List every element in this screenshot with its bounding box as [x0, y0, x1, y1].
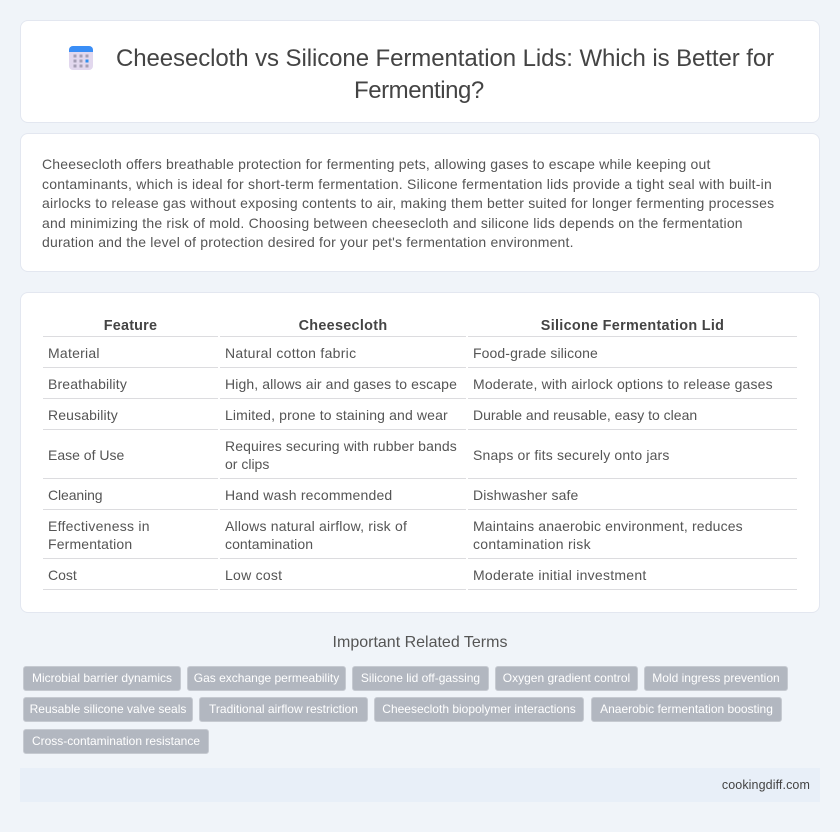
- comparison table: Dishwasher safe: [473, 487, 578, 503]
- comparison table: Snaps or fits securely onto jars: [473, 447, 670, 463]
- icon: calendar: [69, 46, 93, 70]
- related terms tags: Silicone lid off-gassing: [361, 671, 480, 685]
- related terms tags: Cheesecloth biopolymer interactions: [382, 702, 576, 716]
- related terms tags: Oxygen gradient control: [503, 671, 630, 685]
- related terms tags: Reusable silicone valve seals: [30, 702, 186, 716]
- footer bar: [20, 768, 820, 802]
- related terms tags: Cross-contamination resistance: [32, 734, 200, 748]
- title: Cheesecloth vs Silicone Fermentation Lids: Which is Better for: [116, 45, 774, 72]
- footer source: cookingdiff.com: [722, 778, 810, 792]
- panel: introduction: [20, 133, 820, 272]
- text block: introduction: contaminants, which is ideal for short-term fermentation. Silicone fermentation lids provide a tight seal with built-in: [42, 176, 772, 192]
- related terms tags: Traditional airflow restriction: [209, 702, 358, 716]
- comparison table: Natural cotton fabric: [225, 345, 356, 361]
- comparison table: Fermentation: [48, 536, 132, 552]
- comparison table: Food-grade silicone: [473, 345, 598, 361]
- comparison table: Allows natural airflow, risk of: [225, 518, 407, 534]
- related terms tags: [23, 666, 788, 754]
- text block: introduction: [42, 156, 774, 250]
- comparison table: Limited, prone to staining and wear: [225, 407, 448, 423]
- comparison table: Low cost: [225, 567, 282, 583]
- comparison table: Silicone Fermentation Lid: [541, 318, 724, 334]
- related terms tags: Mold ingress prevention: [652, 671, 780, 685]
- comparison table: [43, 318, 797, 590]
- comparison table: Cheesecloth: [299, 318, 387, 334]
- comparison table: High, allows air and gases to escape: [225, 376, 457, 392]
- comparison table: or clips: [225, 456, 269, 472]
- related terms tags: Microbial barrier dynamics: [32, 671, 172, 685]
- text block: introduction: duration and the level of protection desired for your pet's fermentation environment.: [42, 234, 574, 250]
- comparison table: Material: [48, 345, 100, 361]
- title: [116, 45, 774, 104]
- comparison table: contamination risk: [473, 536, 591, 552]
- comparison table: Effectiveness in: [48, 518, 150, 534]
- comparison table: Durable and reusable, easy to clean: [473, 407, 697, 423]
- comparison table: Breathability: [48, 376, 127, 392]
- comparison table: Cleaning: [48, 487, 102, 503]
- heading: related terms: Important Related Terms: [333, 634, 507, 651]
- comparison table: Feature: [104, 318, 157, 334]
- title: Fermenting?: [354, 77, 484, 104]
- panel: comparison table: [20, 292, 820, 613]
- comparison table: Reusability: [48, 407, 118, 423]
- text block: introduction: airlocks to release gas without exposing contents to air, making them better suited for longer fermenting processes: [42, 195, 774, 211]
- comparison table: Maintains anaerobic environment, reduces: [473, 518, 743, 534]
- comparison table: Hand wash recommended: [225, 487, 392, 503]
- comparison table: Cost: [48, 567, 77, 583]
- comparison table: contamination: [225, 536, 313, 552]
- comparison table: Moderate initial investment: [473, 567, 647, 583]
- related terms tags: Gas exchange permeability: [194, 671, 339, 685]
- comparison table: Moderate, with airlock options to release gases: [473, 376, 773, 392]
- related terms tags: Anaerobic fermentation boosting: [600, 702, 773, 716]
- text block: introduction: Cheesecloth offers breathable protection for fermenting pets, allowing gases to escape while keeping out: [42, 156, 711, 172]
- header panel: [20, 20, 820, 123]
- comparison table: Ease of Use: [48, 447, 124, 463]
- comparison table: Requires securing with rubber bands: [225, 438, 457, 454]
- text block: introduction: and minimizing the risk of mold. Choosing between cheesecloth and silicone lids depends on the fermentation: [42, 215, 743, 231]
